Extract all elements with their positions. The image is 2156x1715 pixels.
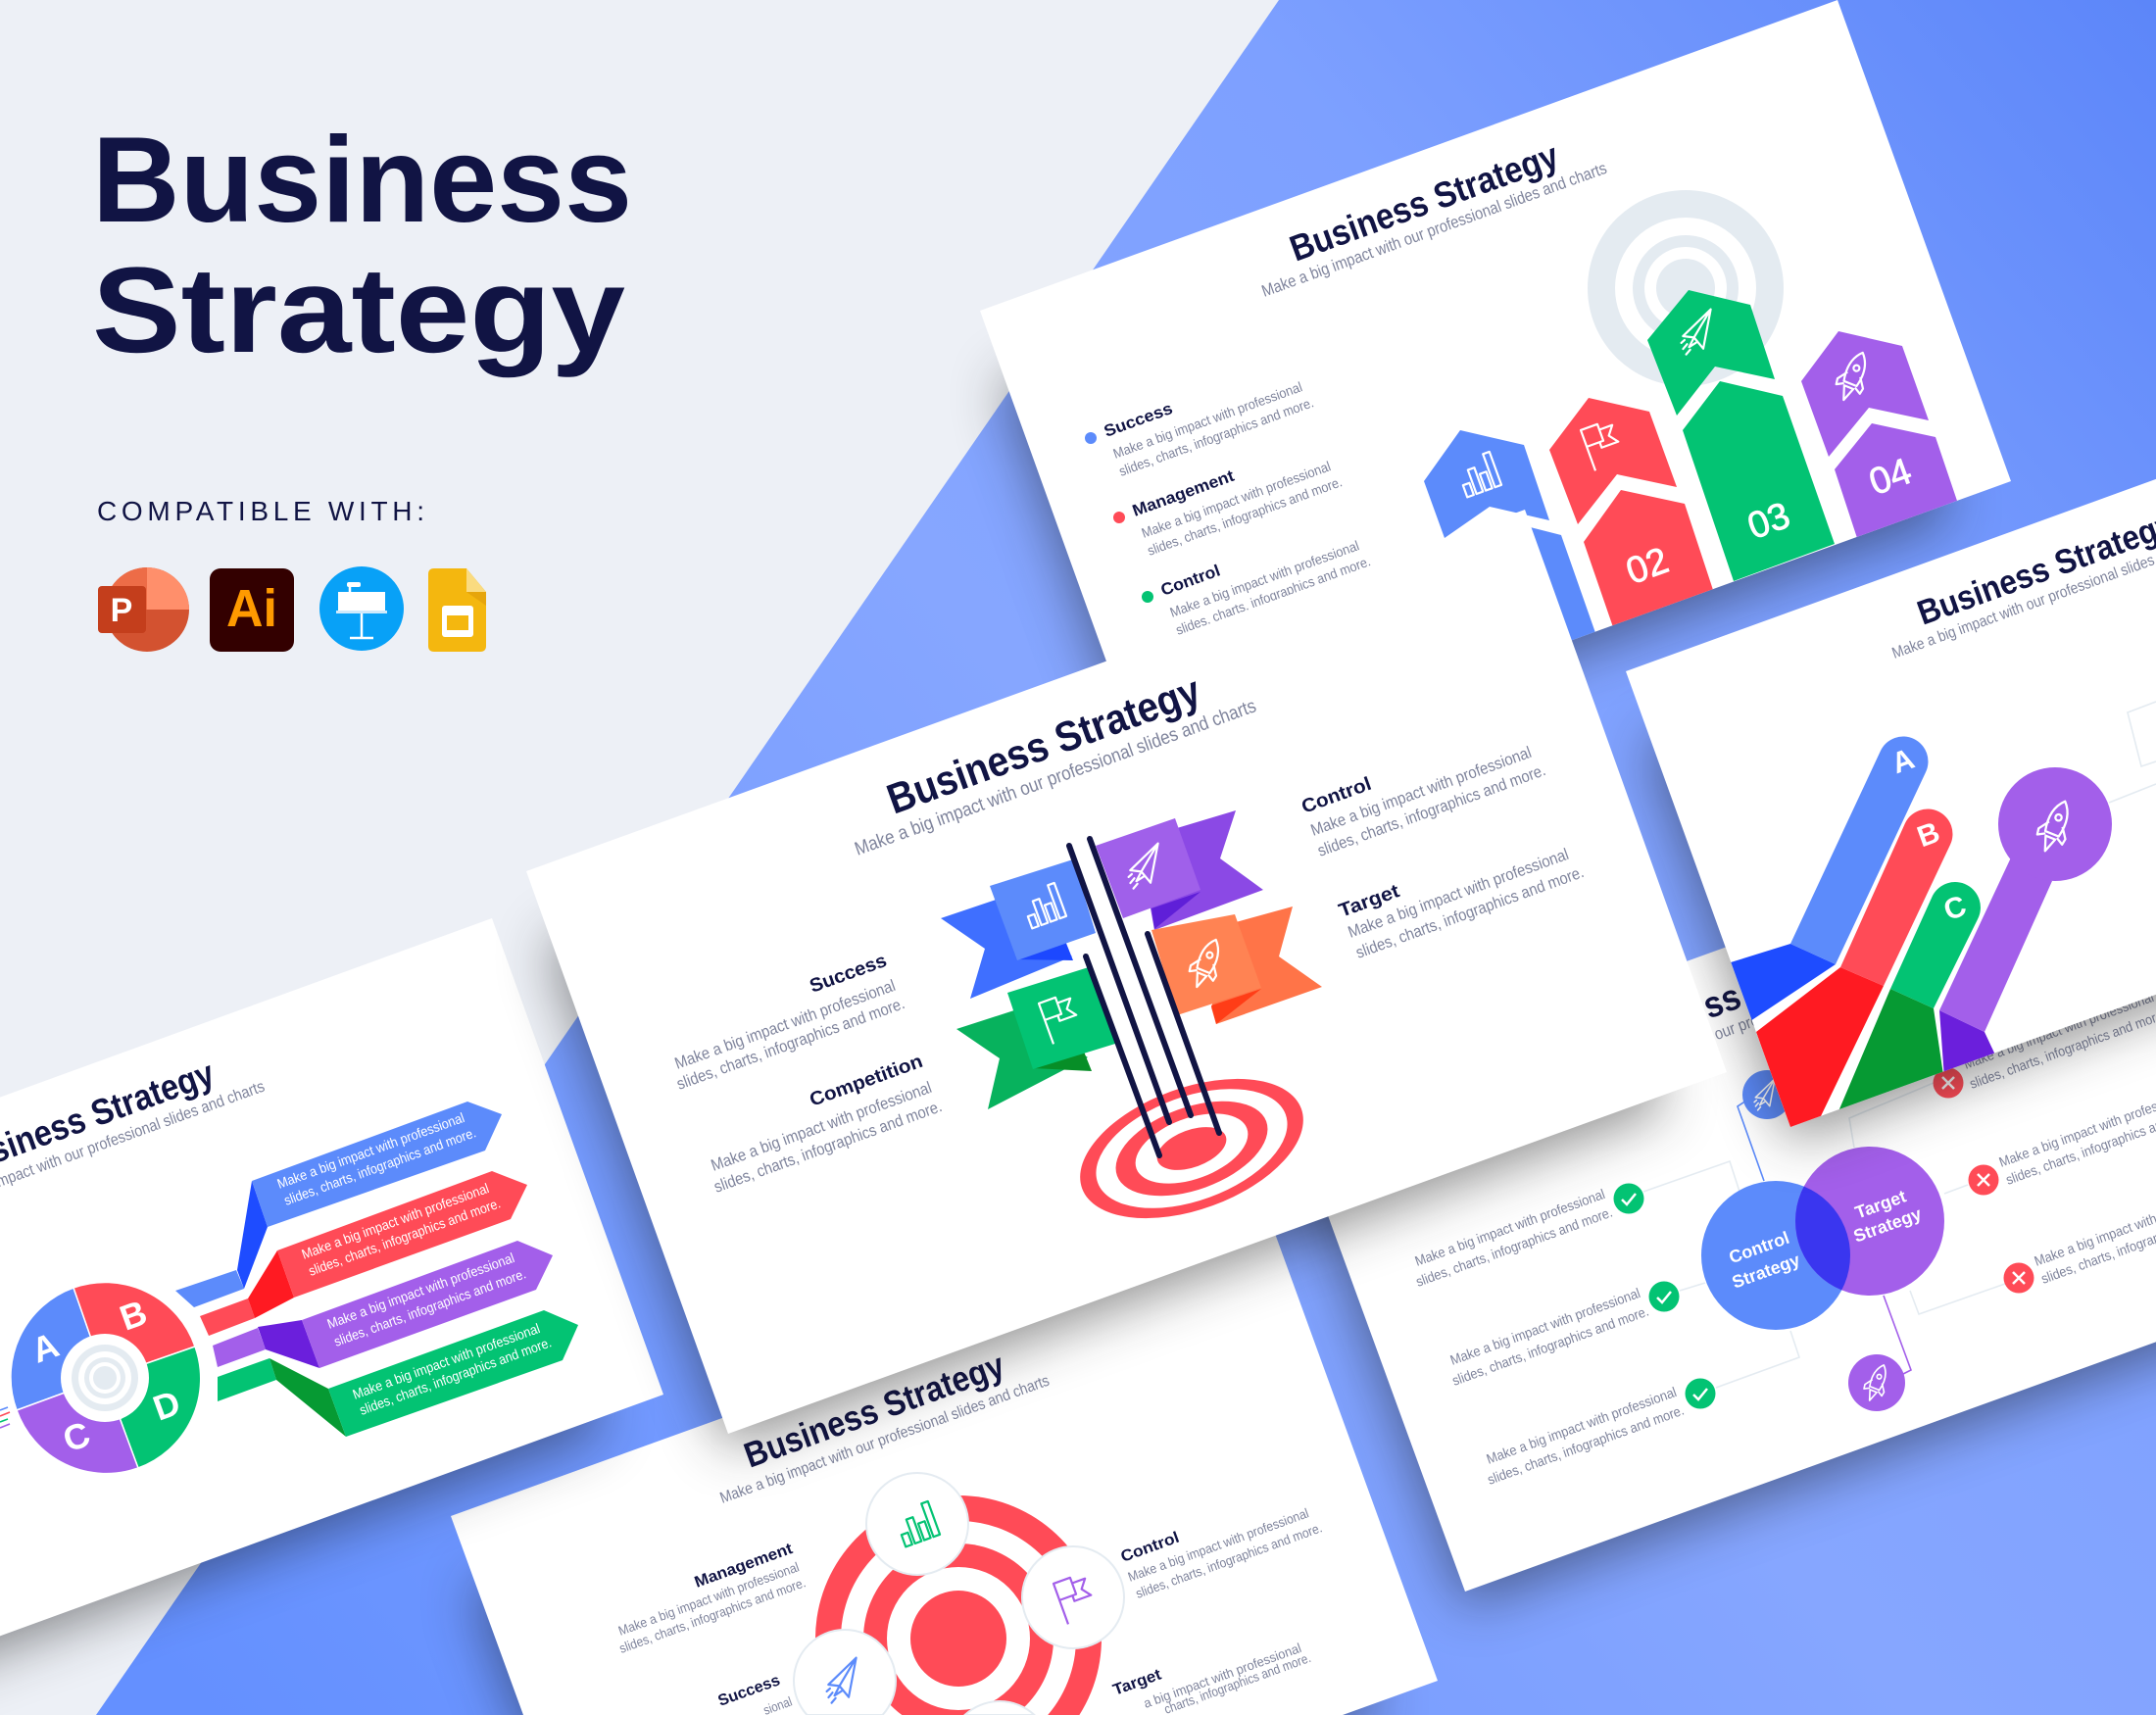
text: target: Target <box>1110 1665 1164 1699</box>
bar C <box>1833 882 1981 1127</box>
flag: blue <box>941 859 1096 999</box>
legend: success: slides, charts, infographics and more. <box>1117 394 1315 479</box>
bar purple with rocket <box>1939 767 2112 1078</box>
connector lines <box>1643 1083 2005 1388</box>
panel: pie with arrow labels slide <box>0 918 663 1702</box>
text: control: slides, charts, infographics and more. <box>1134 1520 1324 1601</box>
slide subtitle: Make a big impact with our professional slides and charts <box>1259 159 1609 301</box>
text: success: Success <box>807 950 890 998</box>
arrows chart <box>1424 290 1957 666</box>
label arrow: green <box>218 1310 578 1437</box>
label arrow: purple <box>213 1241 553 1368</box>
main title: Business <box>92 113 632 248</box>
label arrow: blue: Make a big impact with professional <box>275 1109 466 1192</box>
main title: Strategy <box>92 243 625 378</box>
flag: green <box>956 966 1115 1109</box>
check list <box>1413 1184 1715 1489</box>
pie letters: D <box>148 1382 185 1429</box>
bar C: C <box>1939 890 1971 927</box>
bar B: B <box>1913 816 1944 854</box>
flag: orange <box>1152 906 1322 1024</box>
text: control: slides, charts, infographics and more. <box>1315 760 1548 860</box>
text: competition: Competition <box>807 1051 925 1111</box>
text: target: slides, charts, infographics and more. <box>1353 862 1587 962</box>
text: target: a big impact with professional <box>1142 1641 1303 1711</box>
text: management: Management <box>692 1540 796 1592</box>
text: target: charts, infographics and more. <box>1162 1650 1313 1715</box>
icon circle: plane <box>794 1630 896 1715</box>
check row 2: Make a big impact with professional <box>1448 1286 1642 1369</box>
text: control: Make a big impact with professional <box>1308 743 1534 840</box>
legend: success: Make a big impact with professional <box>1111 378 1304 462</box>
slide title: Business Strategy <box>1593 927 1879 1064</box>
icon: powerpoint: P <box>111 592 132 629</box>
text: success: Make a big impact with professional <box>672 976 898 1073</box>
text: control: Control <box>1118 1529 1182 1566</box>
slide subtitle: Make a big impact with our professional slides and charts <box>718 1373 1052 1507</box>
legend: control: Make a big impact with professional <box>1168 537 1361 620</box>
pie center target <box>61 1334 149 1422</box>
legend: management: Make a big impact with professional <box>1140 458 1333 541</box>
label arrow: red: Make a big impact with professional <box>300 1180 491 1262</box>
legend: management: slides, charts, infographics and more. <box>1146 473 1344 559</box>
check row 3: slides, charts, infographics and more. <box>1486 1403 1687 1489</box>
panel: target rings slide <box>451 1220 1438 1715</box>
sector A <box>11 1288 105 1410</box>
target <box>1061 1052 1322 1246</box>
text: competition <box>709 1051 945 1197</box>
main title <box>92 113 632 378</box>
arrow 01 <box>1424 430 1595 641</box>
cross row 3 <box>2003 1187 2156 1294</box>
label arrow: red: slides, charts, infographics and more. <box>307 1195 503 1279</box>
bar A: A <box>1887 743 1919 780</box>
icon: google slides <box>428 568 486 652</box>
pie letters <box>26 1292 185 1460</box>
slide title: Business Strategy <box>739 1345 1009 1476</box>
pie letters: A <box>26 1324 64 1371</box>
panel: A B C bars slide <box>1626 378 2156 1132</box>
slide title: Business Strategy <box>1285 135 1564 270</box>
check row 3: Make a big impact with professional <box>1485 1385 1679 1468</box>
icon: illustrator: Ai <box>226 579 277 638</box>
panel: slide with numbered arrows <box>976 0 2011 688</box>
slide subtitle: Make a big impact with our professional slides and charts <box>852 695 1259 860</box>
label arrow: red <box>200 1171 527 1336</box>
label arrow: purple: Make a big impact with professional <box>325 1250 516 1332</box>
label arrow: green: Make a big impact with professional <box>351 1320 542 1402</box>
connector lines <box>2109 702 2156 803</box>
arrow 03 <box>1647 290 1835 581</box>
text: management: Make a big impact with professional <box>616 1559 801 1639</box>
arrow 02 <box>1549 398 1713 627</box>
arrow 02: 02 <box>1621 540 1674 593</box>
icon: illustrator <box>210 568 294 652</box>
text: target: Target <box>1336 880 1402 922</box>
text: target: Make a big impact with professional <box>1346 845 1571 942</box>
panel: central flags and target slide <box>526 510 1727 1434</box>
legend: management: Management <box>1130 466 1237 520</box>
venn diagram: Strategy <box>1851 1203 1924 1247</box>
legend: success: Success <box>1102 399 1175 441</box>
flag poles <box>1069 839 1219 1155</box>
text: control: Control <box>1298 773 1374 818</box>
arrow 03: 03 <box>1742 495 1795 548</box>
venn diagram: Target <box>1852 1186 1909 1223</box>
label arrow: blue <box>175 1102 502 1307</box>
small decorative connectors <box>0 1407 10 1428</box>
icon: rocket badge <box>1848 1354 1905 1411</box>
text: control: Make a big impact with professional <box>1126 1505 1310 1585</box>
bar B <box>1756 809 1952 1132</box>
legend: control: slides, charts, infographics and more. <box>1174 553 1372 638</box>
slide subtitle: Make a big impact with our professional slides and charts <box>1569 953 1922 1096</box>
icon circle: bars <box>866 1473 968 1575</box>
bars chart <box>1731 737 2112 1132</box>
compatible with label: COMPATIBLE WITH: <box>97 496 424 526</box>
venn diagram: Control <box>1727 1228 1791 1267</box>
icon circle: flag <box>1022 1546 1124 1648</box>
icon circle: bottom <box>964 1701 1035 1715</box>
label arrow: blue: slides, charts, infographics and more. <box>282 1124 478 1208</box>
text: competition: Make a big impact with professional <box>709 1078 934 1175</box>
venn diagram: Strategy <box>1730 1250 1802 1293</box>
icon: plane badge <box>1742 1070 1791 1119</box>
legend: control: Control <box>1158 561 1223 600</box>
slide title: Business Strategy <box>881 667 1206 823</box>
label arrow: green: slides, charts, infographics and more. <box>358 1334 554 1418</box>
text: management: slides, charts, infographics and more. <box>617 1575 808 1656</box>
flag: purple <box>1096 810 1263 930</box>
text: success: Success <box>715 1671 782 1710</box>
arrow 04 <box>1801 331 1957 538</box>
cross list <box>1933 990 2156 1294</box>
pie letters: C <box>58 1413 95 1460</box>
label arrow: purple: slides, charts, infographics and more. <box>332 1265 528 1349</box>
sector C <box>17 1378 138 1474</box>
venn diagram <box>1701 1147 1944 1330</box>
bar A <box>1731 737 1928 1021</box>
icon: powerpoint <box>98 567 189 652</box>
pie letters: B <box>115 1292 152 1339</box>
check row 2: slides, charts, infographics and more. <box>1450 1304 1651 1390</box>
check row 1: Make a big impact with professional <box>1413 1187 1607 1270</box>
sector D <box>105 1347 201 1468</box>
concentric target <box>815 1495 1102 1715</box>
sector B <box>74 1282 195 1378</box>
text: success: slides, charts, infographics and more. <box>674 994 907 1094</box>
panel: venn control and target strategy slide <box>1288 793 2156 1592</box>
check row 1: slides, charts, infographics and more. <box>1414 1205 1615 1291</box>
text: competition: slides, charts, infographics and more. <box>711 1097 945 1197</box>
pie chart <box>11 1282 201 1474</box>
software icons <box>98 566 486 652</box>
arrow 04: 04 <box>1864 451 1917 504</box>
icon: keynote <box>319 566 404 651</box>
target graphic <box>1588 190 1784 386</box>
